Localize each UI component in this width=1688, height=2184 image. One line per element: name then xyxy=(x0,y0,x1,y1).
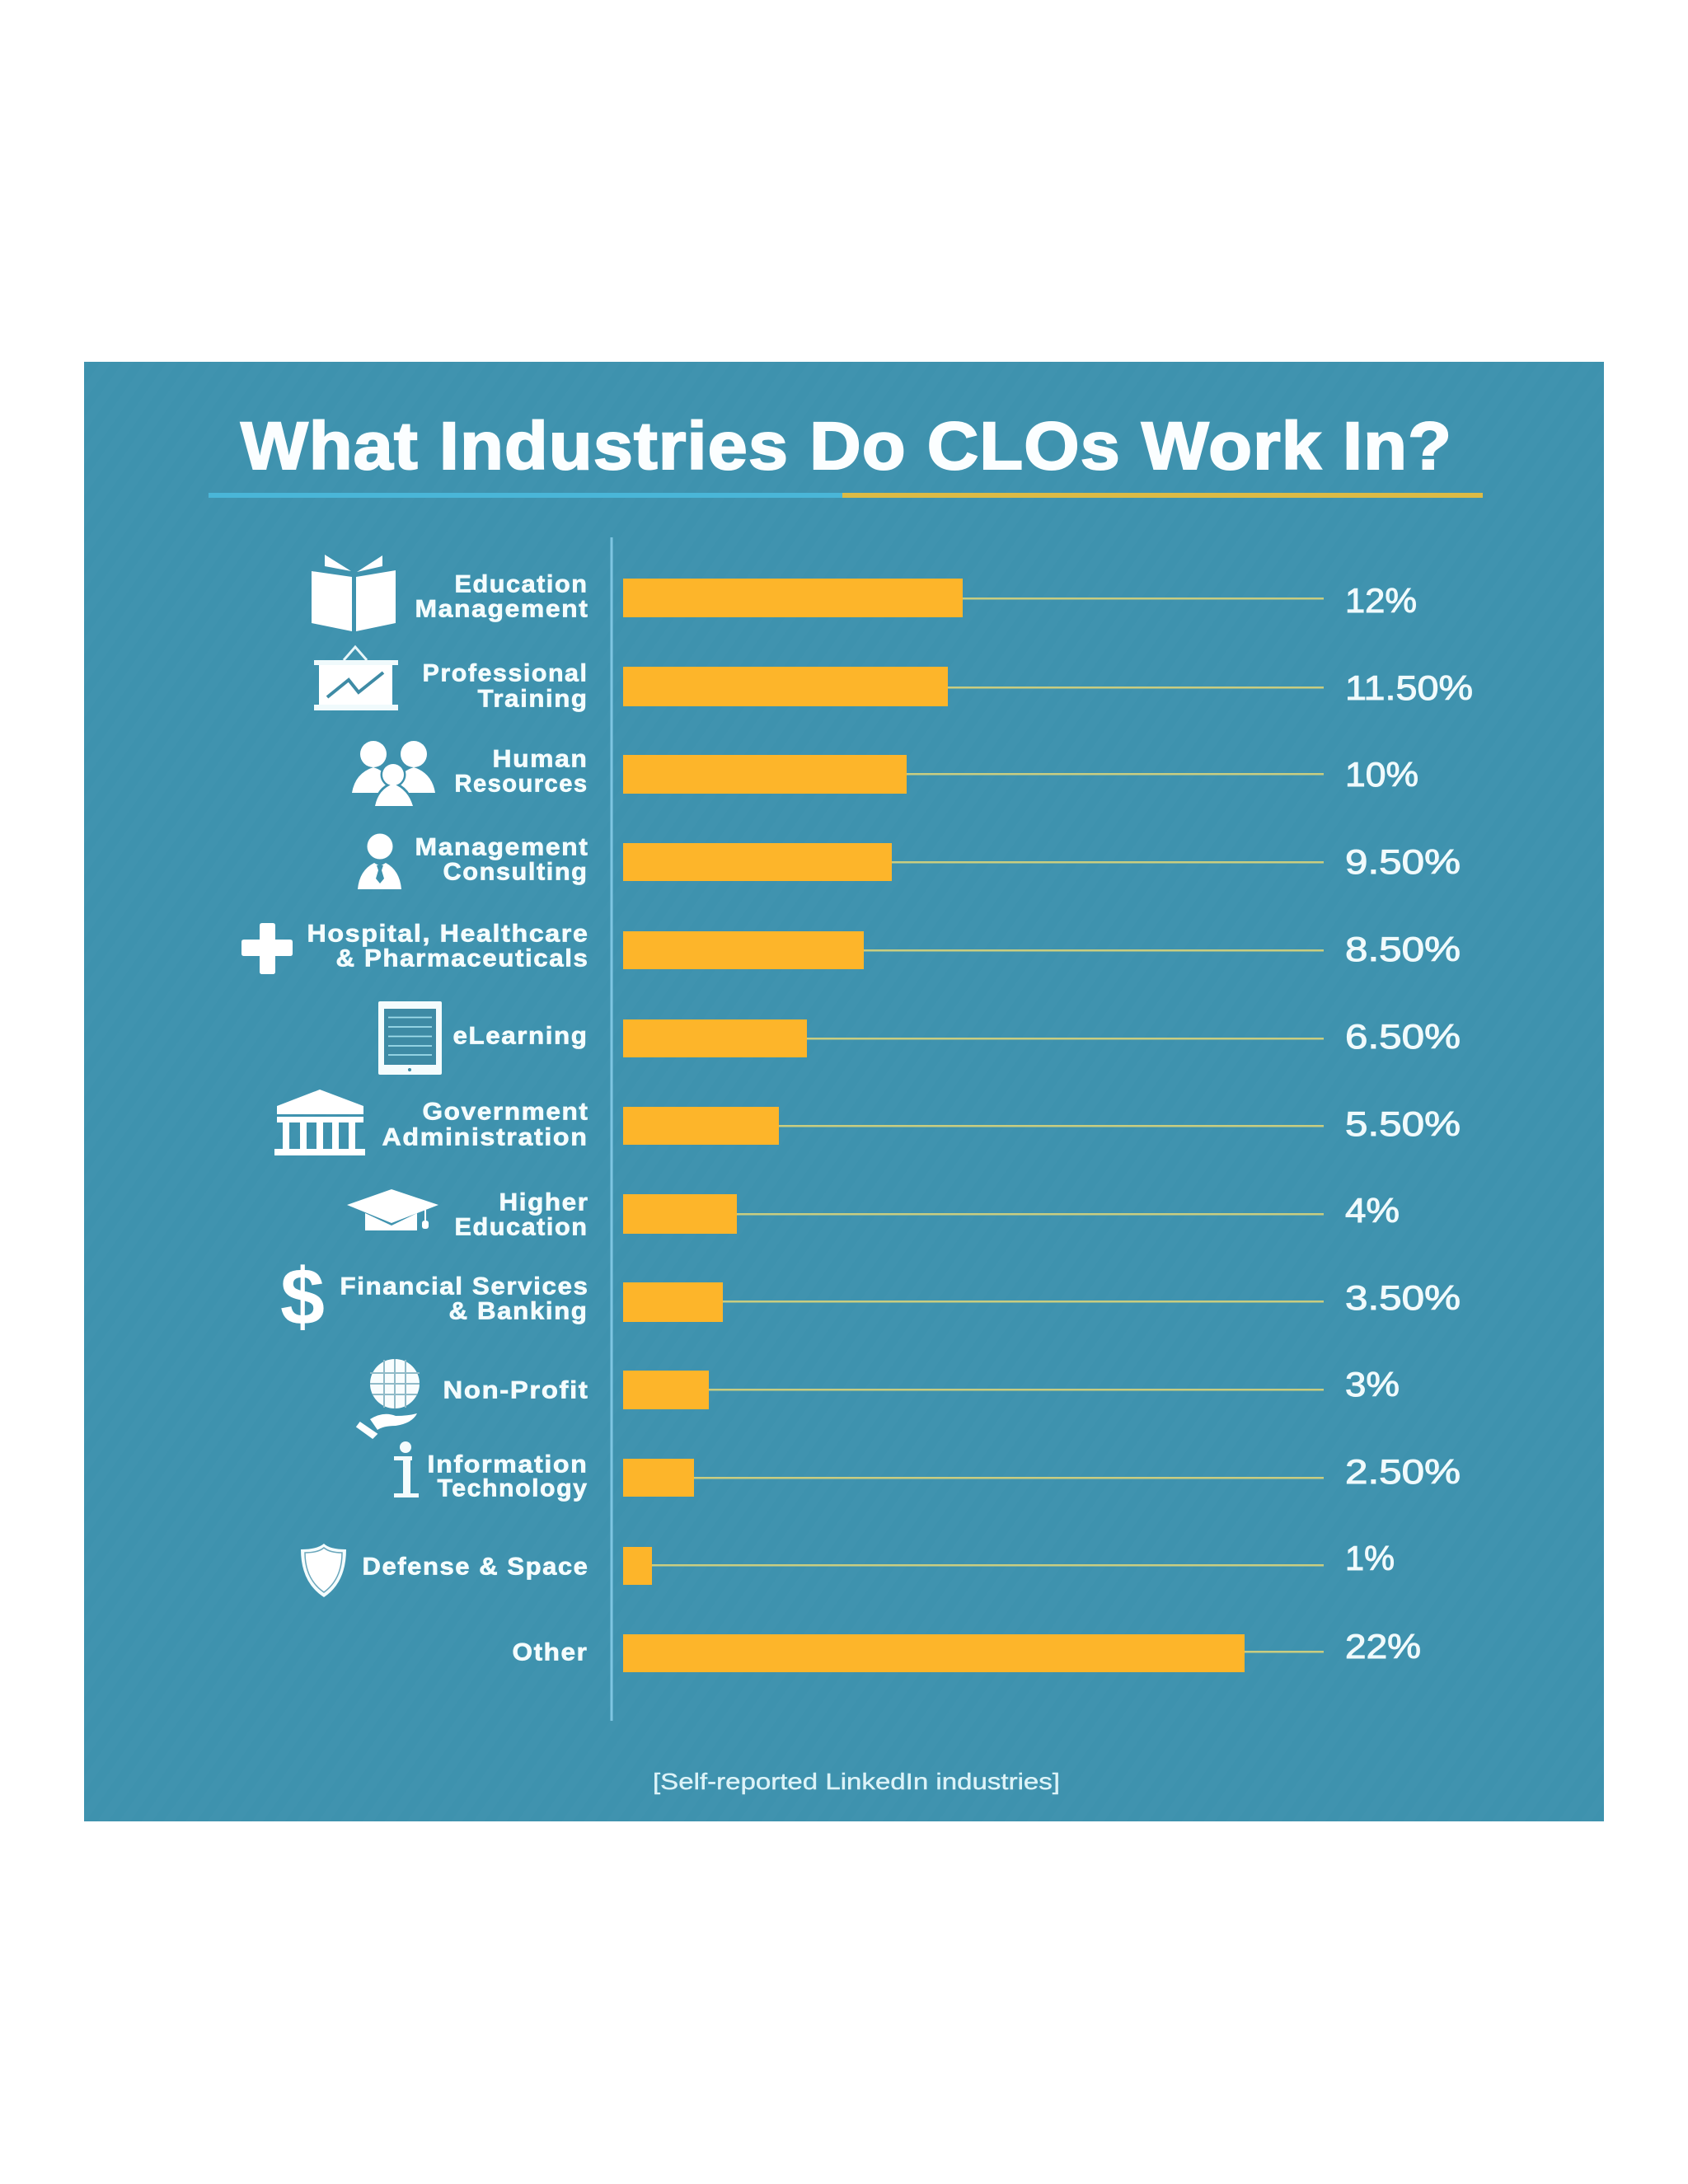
icon: dollar sign: $ xyxy=(280,1252,325,1342)
value: 5.50% xyxy=(1345,1104,1461,1143)
row: Human Resources 10% xyxy=(352,741,1418,808)
value: 6.50% xyxy=(1345,1017,1461,1056)
row: Other 22% xyxy=(513,1627,1421,1672)
label: Higher xyxy=(499,1188,588,1216)
label: Technology xyxy=(437,1475,588,1502)
row: Education Management 12% xyxy=(312,555,1417,631)
row: Information Technology 2.50% xyxy=(394,1441,1461,1502)
leader line xyxy=(652,1564,1324,1566)
label: Education xyxy=(455,570,588,598)
label xyxy=(307,920,588,972)
footnote: [Self-reported LinkedIn industries] xyxy=(653,1769,1060,1794)
icon: presentation board xyxy=(314,647,398,710)
value: 1% xyxy=(1345,1539,1395,1577)
bar xyxy=(623,1194,737,1234)
panel: teal background xyxy=(84,362,1604,1821)
label: Education xyxy=(455,1213,588,1241)
title underline xyxy=(209,493,1483,498)
chart axis line xyxy=(610,537,613,1721)
bar xyxy=(623,1634,1245,1672)
leader line xyxy=(779,1125,1324,1127)
row: Professional Training 11.50% xyxy=(314,647,1473,712)
bar xyxy=(623,843,892,881)
label: Resources xyxy=(455,770,588,798)
label: Human xyxy=(493,745,588,773)
value: 3% xyxy=(1345,1365,1400,1404)
bar xyxy=(623,1459,694,1497)
icon: shield xyxy=(301,1544,346,1597)
value: 11.50% xyxy=(1345,668,1473,707)
row: Higher Education 4% xyxy=(347,1188,1400,1241)
leader line xyxy=(723,1301,1324,1302)
row: Defense & Space 1% xyxy=(301,1539,1395,1597)
label: Consulting xyxy=(443,859,588,885)
value: 12% xyxy=(1345,581,1417,620)
bar xyxy=(623,1282,723,1322)
label: Defense & Space xyxy=(363,1553,588,1581)
leader line xyxy=(892,861,1324,864)
bar xyxy=(623,579,963,617)
icon: medical cross xyxy=(241,923,293,974)
leader line xyxy=(709,1389,1324,1391)
icon: graduation cap xyxy=(347,1189,438,1230)
label xyxy=(427,1451,588,1502)
label: Training xyxy=(478,686,588,712)
label: Professional xyxy=(422,659,588,687)
label xyxy=(340,1272,588,1325)
label xyxy=(382,1098,588,1151)
label: Management xyxy=(415,834,588,860)
row: eLearning 6.50% xyxy=(378,1001,1461,1075)
row: Management Consulting 9.50% xyxy=(358,834,1461,889)
leader line xyxy=(1245,1651,1324,1653)
row: Hospital, Healthcare & Pharmaceuticals 8.50% xyxy=(241,920,1461,974)
label: Non-Profit xyxy=(443,1376,588,1404)
label: Financial Services xyxy=(340,1272,588,1301)
row: Financial Services & Banking 3.50% xyxy=(280,1252,1461,1342)
icon: tablet xyxy=(378,1001,442,1075)
title: What Industries Do CLOs Work In? xyxy=(241,409,1452,484)
label xyxy=(415,570,588,623)
leader line xyxy=(963,598,1324,600)
leader line xyxy=(907,773,1324,775)
row: Non-Profit 3% xyxy=(358,1359,1400,1437)
bar xyxy=(623,1371,709,1409)
bar xyxy=(623,1019,807,1057)
label: Government xyxy=(422,1098,588,1126)
label xyxy=(455,745,588,798)
label: Hospital, Healthcare xyxy=(307,920,588,948)
icon: information letter i xyxy=(394,1441,419,1497)
label: eLearning xyxy=(453,1022,588,1050)
label: & Pharmaceuticals xyxy=(336,944,588,972)
label: Information xyxy=(427,1451,588,1479)
icon: open book xyxy=(312,555,396,631)
leader line xyxy=(807,1038,1324,1040)
leader line xyxy=(864,949,1324,951)
bar xyxy=(623,755,907,794)
label xyxy=(422,659,588,712)
value: 8.50% xyxy=(1345,930,1461,968)
value: 3.50% xyxy=(1345,1278,1461,1317)
label: & Banking xyxy=(448,1297,588,1325)
bar xyxy=(623,1107,779,1145)
value: 4% xyxy=(1345,1191,1400,1230)
row: Government Administration 5.50% xyxy=(274,1090,1461,1155)
label xyxy=(455,1188,588,1241)
icon: three people xyxy=(352,741,435,808)
label: Administration xyxy=(382,1124,588,1151)
label xyxy=(415,834,588,885)
value: 10% xyxy=(1345,755,1418,794)
label: Management xyxy=(415,595,588,623)
value: 9.50% xyxy=(1345,842,1461,881)
value: 2.50% xyxy=(1345,1452,1461,1491)
leader line xyxy=(737,1213,1324,1215)
bar xyxy=(623,667,948,706)
label: Other xyxy=(513,1638,588,1666)
icon: government building xyxy=(274,1090,365,1155)
leader line xyxy=(948,687,1324,689)
bar xyxy=(623,1547,652,1585)
icon: globe in hand xyxy=(358,1359,420,1437)
leader line xyxy=(694,1477,1324,1479)
value: 22% xyxy=(1345,1627,1421,1666)
icon: consultant xyxy=(358,834,401,889)
bar xyxy=(623,931,864,969)
